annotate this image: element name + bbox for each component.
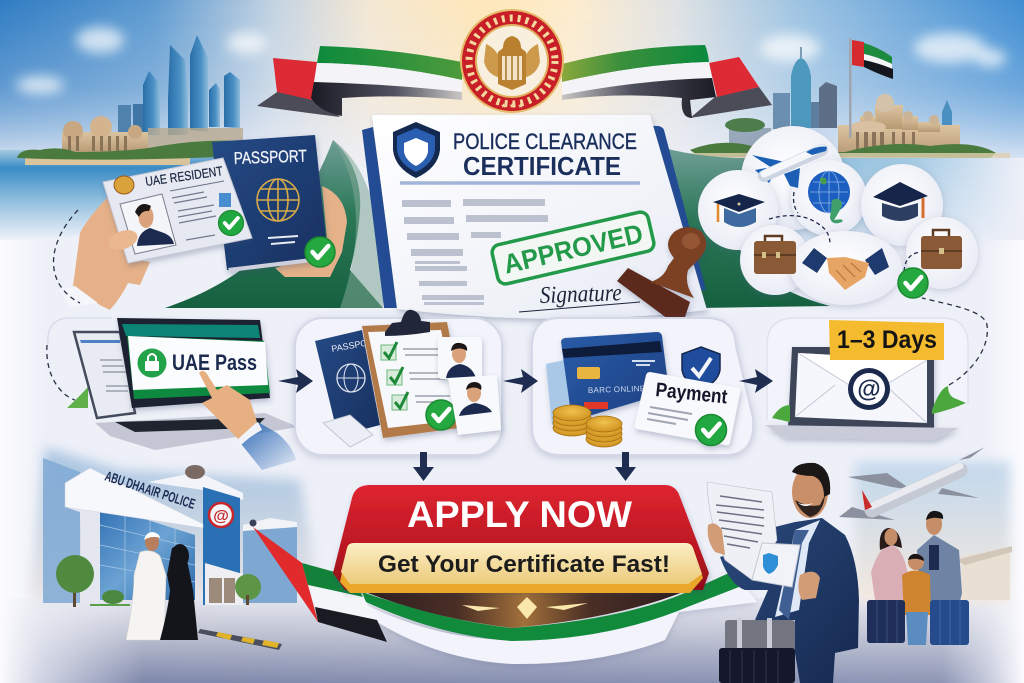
apply now banner [333,485,709,628]
dashed curve [922,298,987,385]
dashed curve left [53,210,80,303]
sign text: ABU DHAAIR POLICE [103,468,197,512]
body [720,518,859,683]
document text lines [402,199,548,305]
signature: Signature [539,280,622,309]
clouds [16,27,1006,94]
palace [838,105,960,155]
child [902,554,931,645]
icon: briefcase left [754,236,796,274]
businessman with certificate [707,463,859,683]
bank card [546,332,669,425]
process step 4: delivery by email [765,298,987,440]
icon: graduation cap right [873,182,928,221]
process step 1: UAE Pass [47,318,298,470]
checklist [381,342,450,410]
apply now text: APPLY NOW [407,494,632,535]
emblem [114,176,134,194]
dashed route lines [769,192,920,285]
coins [553,405,622,447]
right annex [243,522,297,603]
bank card: BARC ONLINE [588,384,646,395]
entrance [205,563,243,605]
icon: globe [808,171,850,223]
check badge [898,268,928,298]
main ribbon under banner [362,573,757,664]
applicant photo 1 [438,337,482,379]
mother [871,528,908,600]
leaf [67,387,88,408]
payment receipt [635,372,740,446]
ground [0,598,1024,683]
police building scene [0,448,1024,683]
green panel right [664,148,830,308]
icon: briefcase right [921,230,962,269]
ID title: UAE RESIDENT [144,163,224,189]
sparkle [462,597,588,619]
left skyline: Abu Dhabi towers and palace [17,35,250,165]
rubber stamp [617,227,706,319]
left ribbon of banner [250,520,387,642]
down arrow left [413,452,434,481]
held paper [707,482,777,580]
father [917,511,962,602]
shirt and tie [775,520,820,617]
police emblem [460,9,564,113]
glass front [100,505,195,600]
certificate document [372,115,707,319]
head [792,463,830,518]
lock icon [138,348,166,378]
passport: PASSPO [331,338,368,354]
green panel left glow [333,140,383,308]
laptop with envelope [765,347,959,440]
pointing hand [199,371,296,470]
gold bar [340,543,703,593]
left flag ribbon [257,46,462,117]
stamp card [323,415,373,447]
process step 2: documents [295,310,502,455]
left edge fade [0,240,45,683]
scene sky [30,448,320,600]
at sign badge: @ [857,376,881,403]
right skyline: city, palace and UAE flag [690,38,1010,158]
tablet UAE Pass screen [117,318,270,408]
certificate title: CERTIFICATE [463,151,621,181]
security shield [682,347,720,390]
side glass block [43,458,80,603]
green panel left [165,140,383,308]
sky background [0,0,1024,170]
airport scene sky [855,462,1010,602]
globe emblem [257,179,299,221]
sparkle wedge [360,590,688,628]
dashed curve [47,345,75,400]
left hand holding ID [60,198,150,310]
police emblem: ★ ★ ★ [500,102,524,110]
sign block [65,468,203,528]
suitcase [719,618,795,683]
suitcases [867,600,969,645]
curb [198,629,282,650]
approved stamp: APPROVED [501,218,646,280]
column [65,507,100,603]
check badge [426,400,456,430]
right sea [739,158,1024,242]
resident ID card [103,158,252,263]
certificate title: POLICE CLEARANCE [453,129,637,154]
right hand holding passport [275,186,347,277]
processing time tag [829,320,944,360]
small certificate [752,543,800,587]
leaves [772,386,966,422]
family travelling [867,511,969,645]
airport terminal [955,546,1012,600]
shield badge [393,122,440,178]
man in white [126,532,166,640]
icon: handshake [802,248,889,290]
logo [209,503,233,527]
blue tower [203,487,240,605]
right hand [798,572,820,600]
left hand [708,523,725,555]
process step 3: payment [532,318,753,455]
at sign badge [848,368,890,410]
left sea [0,150,230,240]
certificate folder [362,126,706,308]
airplane [839,447,985,520]
top roof [148,472,243,500]
woman in black [160,544,198,640]
arrow 3 [739,369,773,393]
right flag ribbon [562,45,772,118]
down arrow right [615,452,636,481]
applicant photo 2 [448,375,501,435]
arrow 2 [503,369,538,393]
arrow 1 [278,369,313,393]
passport check badge [305,237,335,267]
ID detail lines [172,192,216,240]
icon: graduation cap left [713,194,765,227]
left hand thumb [106,226,140,254]
payment label: Payment [654,379,729,409]
gold bar: Get Your Certificate Fast! [378,551,670,578]
processing time tag: 1–3 Days [837,326,937,354]
right edge fade [985,240,1024,683]
signature [519,280,640,312]
passport [315,330,380,436]
UAE Pass label: UAE Pass [172,350,257,375]
trees and bushes [56,555,261,607]
logo: @ [213,508,229,525]
icon: airplane [752,147,827,188]
red plate [333,485,709,590]
clipboard [362,310,467,438]
ID photo [120,194,176,254]
title underline [400,181,640,185]
certificate title [453,129,637,181]
bubble cluster: travel, study, work [698,126,978,305]
passport [212,135,328,272]
passport title: PASSPORT [233,146,307,168]
laptop [74,332,298,450]
